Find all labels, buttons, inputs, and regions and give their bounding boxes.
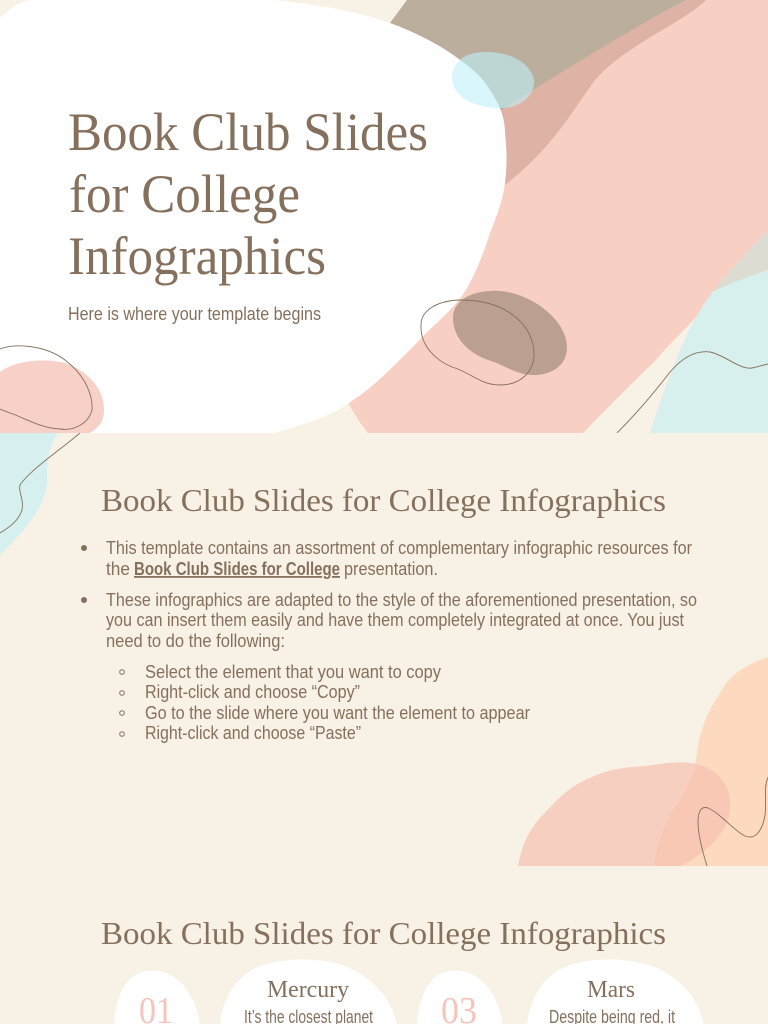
text block: instructions list: Right-click and choose “Copy” [145, 682, 360, 702]
outline: squiggle right [617, 352, 768, 433]
outline: squiggle left [0, 433, 80, 533]
title: cover heading [68, 102, 428, 286]
text block: instructions list: These infographics are adapted to the style of the aforementioned presentation, so [106, 590, 697, 610]
shape: taupe abstract [390, 0, 686, 110]
text block: instructions list: Go to the slide where you want the element to appear [145, 703, 530, 723]
outline: squiggle bottom right [698, 777, 768, 866]
shape: mint and pink overlap [696, 230, 768, 317]
text block: instructions list: Select the element that you want to copy [145, 662, 441, 682]
text block: instructions list: Book Club Slides for College [134, 559, 340, 579]
title: cover heading: for College [69, 164, 300, 224]
outline: loop around brown blob [421, 300, 534, 385]
card: Mars [527, 959, 705, 1024]
shape: pink abstract [340, 0, 768, 433]
shape: mint blob left [0, 433, 58, 555]
shape: peach blob right [654, 657, 768, 866]
title: cover heading: Book Club Slides [68, 102, 428, 162]
panel: instructions slide [0, 433, 768, 866]
number badge: 01 [114, 971, 200, 1024]
text block: instructions list: you can insert them easily and have them completely integrated at once. You just [106, 610, 684, 630]
shape: mint abstract [650, 230, 768, 433]
outline: loop bottom left [0, 346, 92, 429]
number badge: 03 [417, 971, 503, 1024]
shape: brown blob [453, 291, 567, 375]
card: Mercury [220, 959, 398, 1024]
shape: pink blob bottom left [0, 360, 104, 433]
heading: instructions slide: Book Club Slides for College Infographics [101, 482, 666, 518]
shape: light blue blob [452, 52, 534, 108]
text block: instructions list [81, 538, 697, 743]
panel: cover slide [0, 0, 768, 433]
subtitle: Here is where your template begins [68, 304, 321, 324]
title: cover heading: Infographics [68, 226, 326, 286]
text block: instructions list: presentation. [344, 559, 438, 579]
text block: instructions list: This template contains an assortment of complementary infographic resources for [106, 538, 692, 558]
shape: dark pink overlap [501, 0, 706, 185]
text block: instructions list: need to do the following: [106, 631, 285, 651]
text block: instructions list: the [106, 559, 130, 579]
shape: pink blob right [518, 762, 730, 866]
text block: instructions list: Right-click and choose “Paste” [145, 723, 361, 743]
heading: planets slide: Book Club Slides for College Infographics [101, 915, 666, 951]
shape: white blob [0, 0, 506, 433]
card: Mercury: Mercury [267, 977, 349, 1003]
card: Mars: Mars [587, 977, 635, 1003]
